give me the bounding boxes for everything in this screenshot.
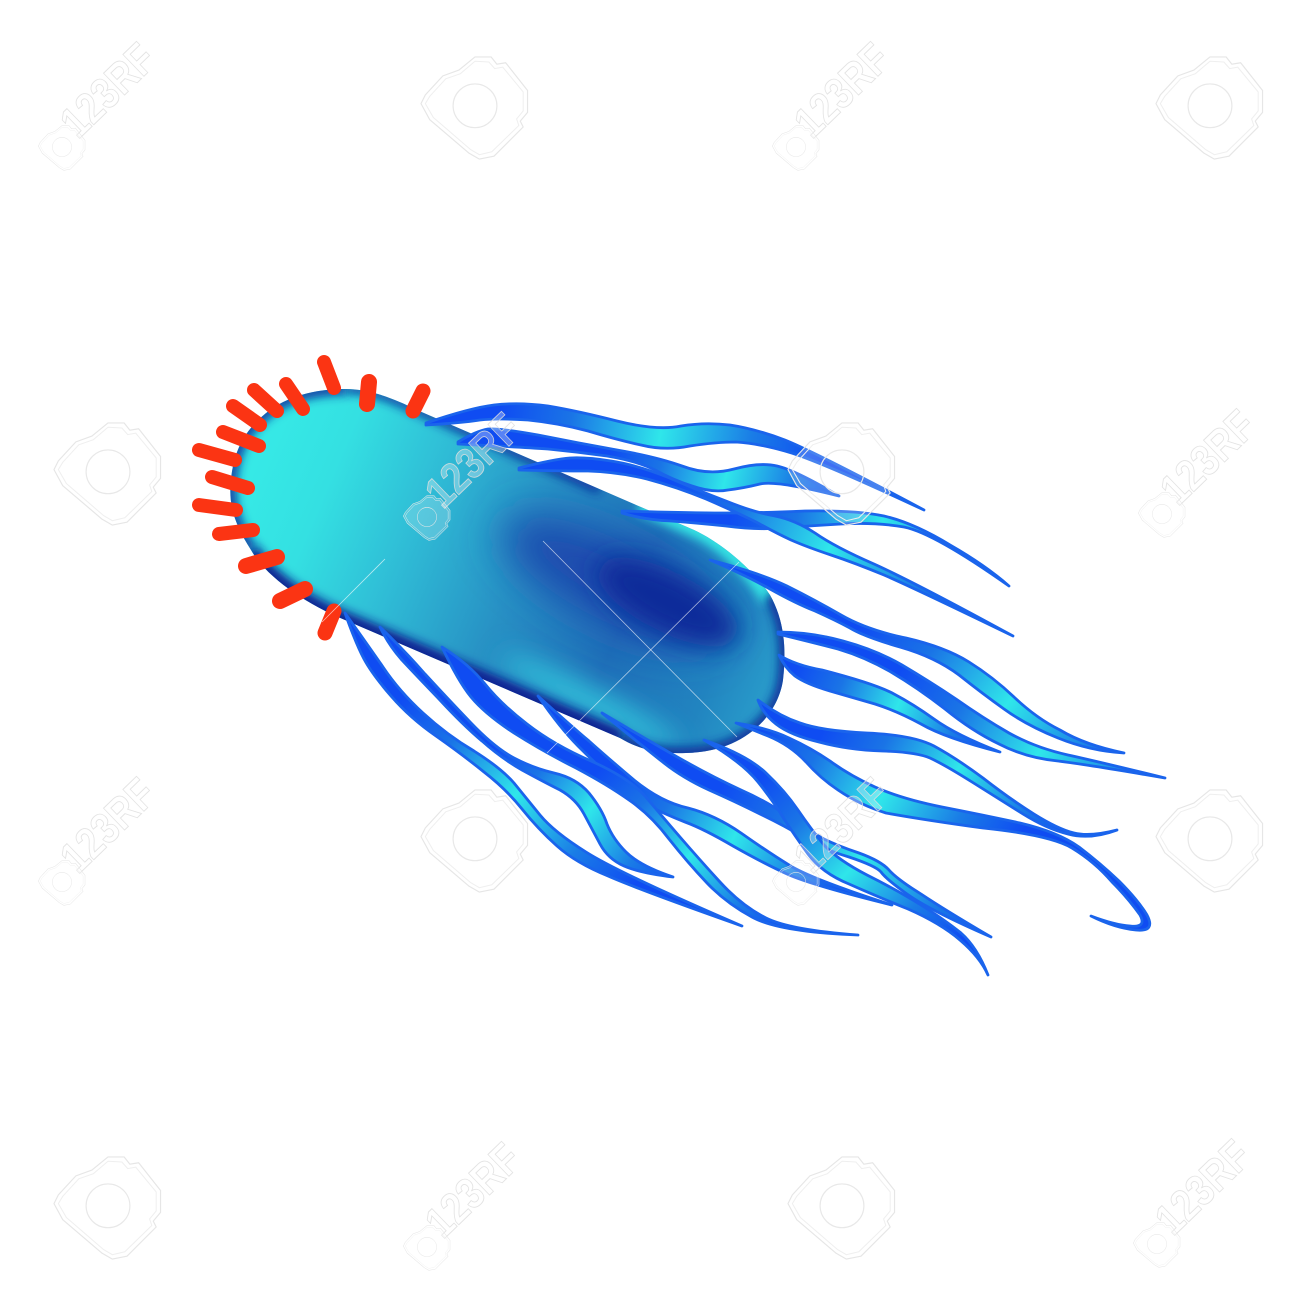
watermark text bottom centre: 123RF xyxy=(416,1134,531,1247)
flagellum 8 xyxy=(758,700,1117,836)
flagellum 9 xyxy=(736,723,1150,930)
flagella: lower group xyxy=(345,613,991,975)
flagellum 7 xyxy=(779,655,1000,752)
watermark text bottom right: 123RF xyxy=(1146,1131,1261,1244)
watermark text right: 123RF xyxy=(1151,401,1266,514)
flagellum 5 xyxy=(710,560,1124,753)
watermark text lower left: 123RF xyxy=(51,769,166,882)
flagellum 10 xyxy=(704,740,988,975)
watermark text lower centre: 123RF xyxy=(785,769,900,882)
flagellum 3 xyxy=(519,458,1013,636)
flagellum 1 xyxy=(426,404,924,510)
flagellum 12 xyxy=(538,696,892,905)
flagellum 14 xyxy=(380,627,673,877)
watermark hairlines xyxy=(322,541,739,753)
flagellum 2 xyxy=(458,429,839,496)
flagella: upper group xyxy=(426,404,1013,636)
pili: red surface hairs xyxy=(199,362,423,633)
bacterium body capsule xyxy=(230,389,784,760)
flagellum 11 xyxy=(602,713,991,937)
watermarks: small camera marks beside logos xyxy=(38,126,1185,1270)
flagellum 4 xyxy=(622,511,1009,586)
flagellum 15 xyxy=(345,613,742,926)
flagellum 13 xyxy=(442,647,858,935)
watermark text on bacterium: 123RF xyxy=(416,404,531,517)
watermark text top centre: 123RF xyxy=(785,34,900,147)
flagella: right group xyxy=(710,560,1165,930)
flagellum 6 xyxy=(778,632,1165,778)
watermark text top left: 123RF xyxy=(51,34,166,147)
